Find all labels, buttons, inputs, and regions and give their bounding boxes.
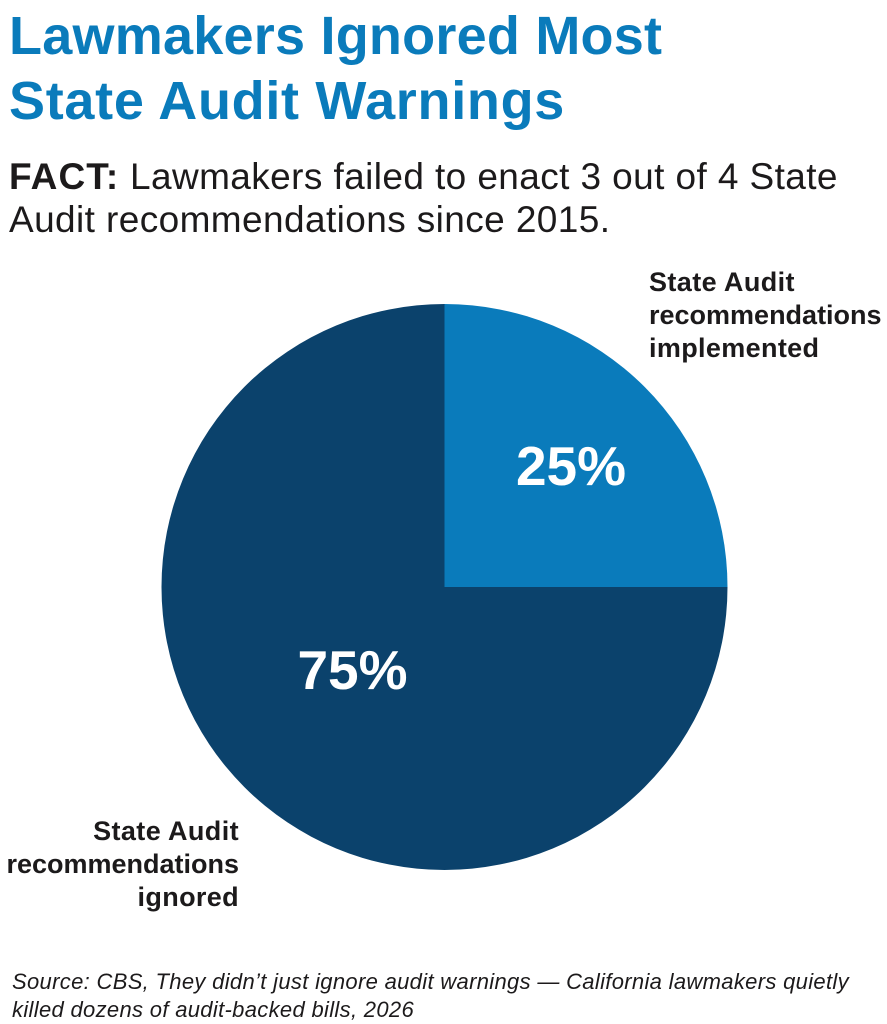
title: Lawmakers Ignored Most [9,6,662,66]
label: ignored: recommendations [6,849,239,879]
slice: ignored 75% [161,304,727,870]
label: ignored: ignored [138,882,239,912]
label: ignored [6,816,239,912]
label: implemented: implemented [649,333,819,363]
title: State Audit Warnings [9,71,565,131]
source note: killed dozens of audit-backed bills, 2026 [12,997,414,1022]
label: ignored: State Audit [93,816,239,846]
fact statement: Audit recommendations since 2015. [9,199,610,240]
value: 75%: 75% [297,639,408,701]
source note [12,969,850,1022]
slice: implemented 25% [444,304,728,587]
label: implemented: recommendations [649,300,882,330]
value: 25%: 25% [516,435,626,497]
label: implemented: State Audit [649,267,795,297]
title [9,6,662,131]
fact statement: FACT: Lawmakers failed to enact 3 out of 4 State [9,156,838,197]
label: implemented [649,267,882,363]
source note: Source: CBS, They didn’t just ignore audit warnings — California lawmakers quietly [12,969,849,994]
fact statement [9,156,838,240]
